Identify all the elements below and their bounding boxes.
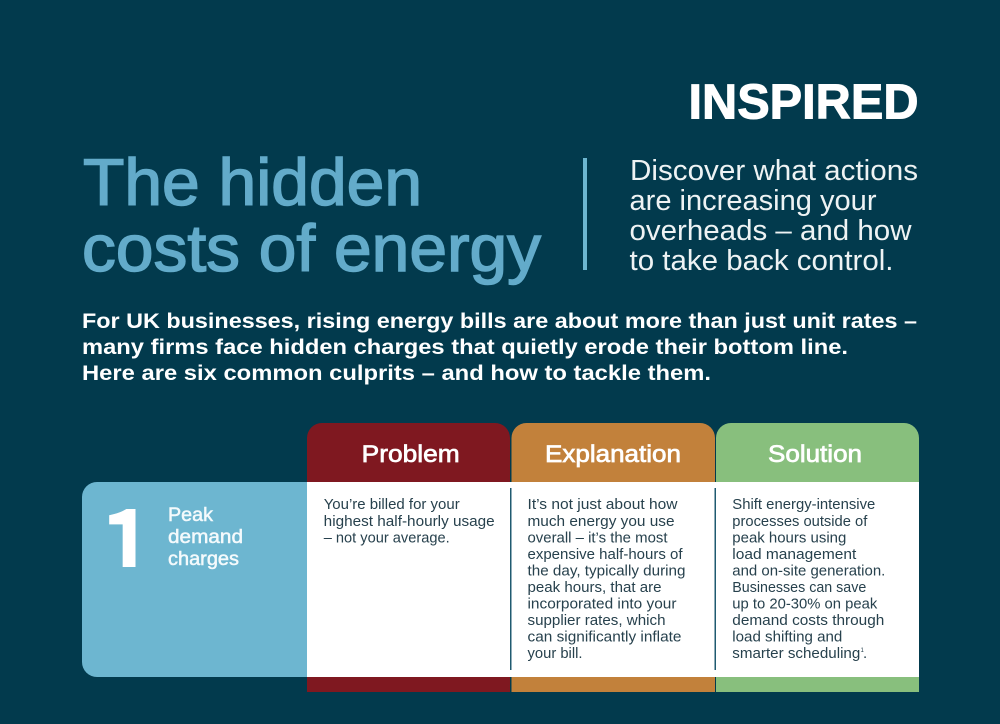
subtitle: overheads – and how (630, 215, 913, 247)
solution text: Businesses can save (732, 579, 866, 596)
solution text (732, 496, 885, 662)
title: The hidden (83, 145, 422, 219)
solution text: demand costs through (732, 612, 884, 629)
solution text: 1 (860, 648, 864, 654)
solution text: up to 20-30% on peak (732, 596, 878, 612)
title: costs of energy (82, 211, 541, 285)
solution text: and on-site generation. (732, 562, 885, 580)
title divider (583, 158, 587, 270)
column dividers (510, 488, 716, 670)
subtitle: are increasing your (630, 185, 877, 217)
solution text: smarter scheduling (732, 645, 860, 662)
column: explanation header (512, 423, 715, 692)
problem text (324, 496, 495, 546)
logo: INSPIRED: INSPIRED (688, 76, 918, 130)
intro text: many firms face hidden charges that quietly erode their bottom line. (82, 335, 848, 359)
row name: Peak (168, 504, 213, 526)
row name: charges (168, 548, 239, 570)
subtitle: to take back control. (630, 245, 894, 277)
problem text: – not your average. (324, 530, 450, 546)
intro text: Here are six common culprits – and how to tackle them. (82, 361, 711, 385)
intro text: For UK businesses, rising energy bills are about more than just unit rates – (82, 309, 917, 333)
explanation text: peak hours, that are (528, 579, 662, 596)
problem text: You’re billed for your (324, 496, 460, 513)
row number: 1 (98, 465, 158, 610)
row name: demand (168, 526, 243, 548)
solution text: Shift energy-intensive (732, 496, 875, 513)
explanation text: can significantly inflate (528, 628, 682, 646)
solution text: . (863, 645, 867, 662)
column: problem header (307, 423, 510, 692)
title (82, 145, 541, 285)
subtitle: Discover what actions (630, 155, 918, 187)
column: solution header (716, 423, 919, 692)
explanation text: incorporated into your (528, 596, 676, 612)
table (82, 423, 919, 692)
explanation text: expensive half-hours of (528, 546, 683, 563)
intro text (82, 309, 917, 385)
column: explanation header: Explanation (545, 441, 681, 468)
subtitle (630, 155, 918, 277)
column: solution header: Solution (768, 441, 862, 468)
solution text: load management (732, 546, 857, 563)
column: problem header: Problem (362, 441, 460, 468)
explanation text: overall – it’s the most (528, 530, 668, 546)
white row background (307, 482, 919, 677)
explanation text: your bill. (528, 645, 582, 662)
explanation text (528, 496, 686, 662)
explanation text: supplier rates, which (528, 612, 666, 629)
solution text: processes outside of (732, 513, 868, 530)
problem text: highest half-hourly usage (324, 513, 495, 530)
explanation text: much energy you use (528, 513, 674, 530)
solution text: load shifting and (732, 628, 842, 646)
row name (168, 504, 243, 570)
solution text: peak hours using (732, 530, 846, 546)
row label panel (82, 465, 307, 677)
explanation text: the day, typically during (528, 562, 686, 580)
explanation text: It’s not just about how (528, 496, 678, 513)
